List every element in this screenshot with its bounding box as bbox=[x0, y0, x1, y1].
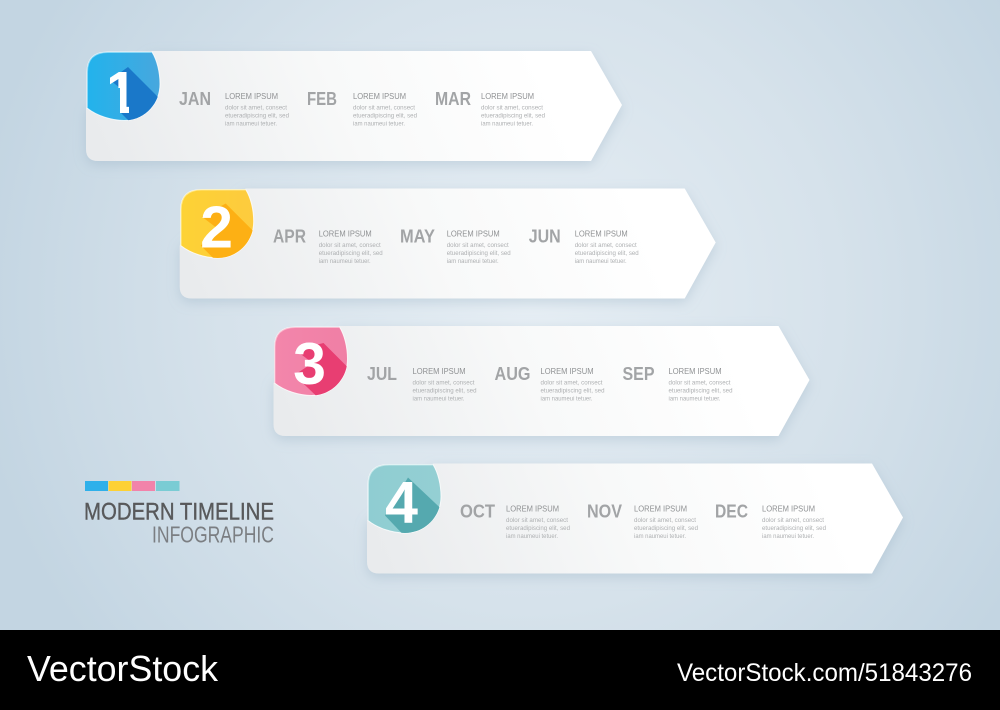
months: March: MAR bbox=[435, 89, 471, 109]
badge 1: 1 bbox=[105, 60, 137, 126]
months: February: FEB bbox=[307, 89, 337, 109]
watermark banner: VectorStock bbox=[27, 648, 219, 689]
arrow card 1 bbox=[86, 51, 622, 161]
months: June bbox=[529, 226, 639, 265]
months: February: iam naumeui tetuer. bbox=[353, 120, 405, 128]
months: May: etueradipiscing elit, sed bbox=[447, 250, 511, 257]
panel: step 2 April to June bbox=[180, 188, 716, 298]
months: August: LOREM IPSUM bbox=[540, 366, 594, 376]
months: December: LOREM IPSUM bbox=[762, 504, 815, 514]
months: September bbox=[622, 364, 733, 402]
arrow card 3 bbox=[274, 326, 810, 436]
months: November: NOV bbox=[587, 502, 622, 522]
months: October: etueradipiscing elit, sed bbox=[506, 525, 570, 532]
months: November: LOREM IPSUM bbox=[634, 504, 687, 514]
title: MODERN TIMELINE bbox=[84, 498, 274, 526]
months: December: DEC bbox=[715, 502, 748, 522]
months: August: iam naumeui tetuer. bbox=[540, 396, 593, 402]
panel: step 3 July to September bbox=[274, 326, 810, 436]
panel: step 4 October to December bbox=[367, 464, 903, 574]
arrow card 4 bbox=[367, 464, 903, 574]
months: November: dolor sit amet, consect bbox=[634, 517, 696, 524]
months: May: iam naumeui tetuer. bbox=[447, 258, 499, 265]
months: September: dolor sit amet, consect bbox=[668, 380, 731, 386]
months: June: iam naumeui tetuer. bbox=[575, 258, 627, 265]
months: July: dolor sit amet, consect bbox=[412, 380, 475, 386]
months: June: JUN bbox=[529, 226, 561, 246]
months: July bbox=[367, 364, 477, 402]
months: January: etueradipiscing elit, sed bbox=[225, 112, 289, 120]
watermark banner: VectorStock.com/51843276 bbox=[677, 659, 972, 687]
badge 2: 2 bbox=[200, 194, 233, 260]
badge 1 bbox=[87, 52, 162, 126]
months: November: etueradipiscing elit, sed bbox=[634, 525, 698, 532]
months: January: JAN bbox=[179, 89, 211, 109]
months: January: dolor sit amet, consect bbox=[225, 104, 287, 112]
months: June: dolor sit amet, consect bbox=[575, 242, 637, 249]
months: October: LOREM IPSUM bbox=[506, 504, 559, 514]
months: May: MAY bbox=[400, 226, 435, 246]
months: September: SEP bbox=[622, 364, 654, 384]
months: April: etueradipiscing elit, sed bbox=[319, 250, 383, 257]
months: April: iam naumeui tetuer. bbox=[319, 258, 371, 265]
months: July: iam naumeui tetuer. bbox=[412, 396, 465, 402]
months: October: OCT bbox=[460, 502, 495, 522]
months: August: dolor sit amet, consect bbox=[540, 380, 603, 386]
months: March: iam naumeui tetuer. bbox=[481, 120, 533, 128]
months: May: LOREM IPSUM bbox=[447, 228, 500, 238]
months: March: dolor sit amet, consect bbox=[481, 104, 543, 112]
panel: step 1 January to March bbox=[86, 51, 622, 161]
months: February: LOREM IPSUM bbox=[353, 91, 406, 101]
months: April: APR bbox=[273, 226, 306, 246]
months: January: iam naumeui tetuer. bbox=[225, 120, 277, 128]
badge 2 bbox=[181, 190, 256, 262]
watermark banner bbox=[0, 630, 1000, 710]
months: October: iam naumeui tetuer. bbox=[506, 533, 558, 540]
arrow card 2 bbox=[180, 188, 716, 298]
title bbox=[84, 498, 274, 548]
months: November: iam naumeui tetuer. bbox=[634, 533, 686, 540]
months: July: LOREM IPSUM bbox=[412, 366, 466, 376]
months: December bbox=[715, 502, 826, 540]
months: November bbox=[587, 502, 698, 540]
months: October bbox=[460, 502, 570, 540]
badge 3 bbox=[274, 327, 350, 400]
months: December: etueradipiscing elit, sed bbox=[762, 525, 826, 532]
months: September: etueradipiscing elit, sed bbox=[668, 388, 733, 394]
months: February bbox=[307, 89, 417, 128]
months: February: etueradipiscing elit, sed bbox=[353, 112, 417, 120]
badge 4 bbox=[368, 464, 443, 536]
badge 3: 3 bbox=[293, 331, 326, 397]
months: July: JUL bbox=[367, 364, 397, 384]
months: August: AUG bbox=[494, 364, 530, 384]
months: March bbox=[435, 89, 545, 128]
months: May: dolor sit amet, consect bbox=[447, 242, 509, 249]
months: September: LOREM IPSUM bbox=[668, 366, 722, 376]
months: June: LOREM IPSUM bbox=[575, 228, 628, 238]
colour legend bars bbox=[85, 481, 180, 491]
months: March: LOREM IPSUM bbox=[481, 91, 534, 101]
months: January bbox=[179, 89, 289, 128]
months: December: iam naumeui tetuer. bbox=[762, 533, 814, 540]
months: February: dolor sit amet, consect bbox=[353, 104, 415, 112]
months: December: dolor sit amet, consect bbox=[762, 517, 824, 524]
months: July: etueradipiscing elit, sed bbox=[412, 388, 477, 394]
months: October: dolor sit amet, consect bbox=[506, 517, 568, 524]
months: August bbox=[494, 364, 605, 402]
months: May bbox=[400, 226, 511, 265]
months: September: iam naumeui tetuer. bbox=[668, 396, 721, 402]
months: March: etueradipiscing elit, sed bbox=[481, 112, 545, 120]
months: June: etueradipiscing elit, sed bbox=[575, 250, 639, 257]
months: August: etueradipiscing elit, sed bbox=[540, 388, 605, 394]
months: April: dolor sit amet, consect bbox=[319, 242, 381, 249]
months: April bbox=[273, 226, 383, 265]
title: INFOGRAPHIC bbox=[152, 522, 274, 548]
months: April: LOREM IPSUM bbox=[319, 228, 372, 238]
badge 4: 4 bbox=[385, 470, 418, 536]
months: January: LOREM IPSUM bbox=[225, 91, 278, 101]
